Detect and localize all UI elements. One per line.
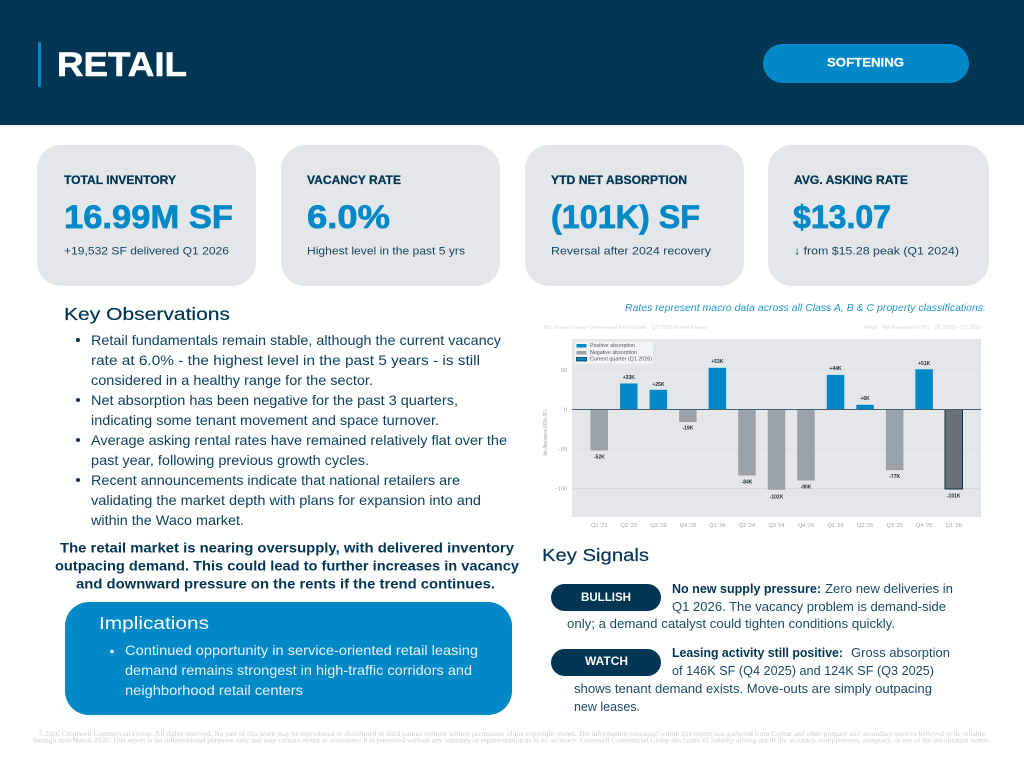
footer disclaimer: through mid-March 2026. This report is for informational purposes only and may contain errors or omissions; it is presented without any warranty or representation as to its accuracy. Cromwell Commercial Group disclaims all liability arising out of the accuracy, completeness, adequacy, or use of the information herein. [33, 736, 991, 744]
KPI card: YTD net absorption [525, 145, 744, 286]
signal: watch: new leases. [574, 700, 640, 714]
bold takeaway: and downward pressure on the rents if the trend continues. [76, 576, 495, 592]
KPI card: YTD net absorption: Reversal after 2024 recovery [551, 246, 712, 258]
key observations bullet list: considered in a healthy range for the sector. [91, 372, 373, 388]
KPI card: vacancy rate: 6.0% [307, 199, 390, 235]
key observations bullet list: Net absorption has been negative for the past 3 quarters, [91, 392, 458, 408]
KPI card: average asking rate: ↓ from $15.28 peak (Q1 2024) [794, 246, 959, 258]
x axis labels: Q1 '24 [709, 523, 726, 529]
x axis labels: Q1 '26 [946, 523, 962, 529]
KPI card: total inventory: 16.99M SF [64, 199, 233, 235]
KPI card: vacancy rate [281, 145, 500, 286]
bar value labels: +51K [918, 361, 931, 367]
footer disclaimer: ©2026 Cromwell Commercial Group. All rights reserved. No part of this work may be reproduced or distributed to third parties without written permission of the copyright owner. The information contained within this report was gathered from CoStar and other primary and secondary sources believed to be reliable [39, 730, 985, 738]
bold takeaway [55, 540, 520, 592]
KPI card: YTD net absorption: (101K) SF [551, 199, 700, 235]
x axis labels: Q3 '23 [650, 523, 667, 529]
bar value labels: -84K [742, 480, 753, 486]
bar chart: net absorption: 0 [564, 408, 567, 414]
signal: bullish: Q1 2026. The vacancy problem is demand-side [672, 600, 946, 614]
header band [0, 0, 1024, 125]
key observations bullet list: Average asking rental rates have remained relatively flat over the [91, 432, 507, 448]
KPI card: average asking rate [768, 145, 989, 286]
panel: implications [65, 602, 512, 715]
bar value labels: -52K [594, 454, 605, 460]
bar value labels: -77K [889, 474, 901, 480]
signal: bullish: only; a demand catalyst could tighten conditions quickly. [567, 617, 895, 631]
KPI card: average asking rate: AVG. ASKING RATE [794, 173, 908, 187]
bars [572, 368, 981, 490]
signal: watch: Gross absorption [851, 646, 950, 660]
key observations bullet list: past year, following previous growth cycles. [91, 452, 369, 468]
x axis labels: Q2 '25 [857, 523, 873, 529]
key signals heading: Key Signals [542, 545, 649, 565]
status pill [763, 44, 969, 83]
signal: watch: shows tenant demand exists. Move-outs are simply outpacing [574, 682, 932, 696]
panel: implications: neighborhood retail centers [125, 682, 303, 698]
KPI card: total inventory [37, 145, 256, 286]
panel: implications: Implications [99, 613, 209, 633]
bar value labels: -101K [947, 494, 961, 500]
key observations bullet list: within the Waco market. [90, 512, 244, 528]
chart note: Rates represent macro data across all Class A, B & C property classifications. [625, 302, 986, 314]
x axis labels: Q2 '23 [621, 523, 637, 529]
key observations bullet list: validating the market depth with plans for expansion into and [91, 492, 481, 508]
bar value labels: -19K [682, 426, 694, 432]
legend: Current quarter (Q1 2026) [590, 357, 652, 363]
bar value labels: +33K [623, 375, 635, 381]
key observations bullet list: rate at 6.0% - the highest level in the past 5 years - is still [91, 352, 480, 368]
key observations bullet list: Recent announcements indicate that national retailers are [91, 472, 460, 488]
bar chart: net absorption: Retail · Net Absorption (SF) · Q1 2023 – Q1 2026 [864, 325, 981, 331]
signal: watch: WATCH [585, 656, 628, 668]
title: RETAIL [57, 46, 187, 84]
KPI card: average asking rate: $13.07 [793, 199, 891, 235]
bar value labels: +6K [860, 396, 870, 402]
x axis labels [591, 523, 962, 529]
signal: bullish: BULLISH [581, 592, 631, 604]
footer disclaimer [33, 730, 991, 744]
legend [575, 342, 653, 364]
bar chart: net absorption: 50 [561, 368, 567, 374]
key observations heading: Key Observations [64, 304, 230, 324]
bold takeaway: outpacing demand. This could lead to further increases in vacancy [55, 558, 520, 574]
bar value labels: -102K [770, 494, 784, 500]
bold takeaway: The retail market is nearing oversupply, with delivered inventory [60, 540, 515, 556]
key observations bullet list [76, 332, 507, 528]
panel: implications: Continued opportunity in service-oriented retail leasing [125, 642, 478, 658]
status pill: SOFTENING [827, 58, 904, 70]
bar chart: net absorption: McLennan County Commercial Real Estate · Q1 2026 Market Report [544, 325, 708, 331]
key observations bullet list: indicating some tenant movement and space turnover. [91, 412, 439, 428]
x axis labels: Q4 '24 [798, 523, 814, 529]
x axis labels: Q3 '24 [768, 523, 785, 529]
KPI card: total inventory: TOTAL INVENTORY [64, 173, 176, 187]
bar chart: net absorption [543, 325, 981, 529]
panel: implications: demand remains strongest in high-traffic corridors and [125, 662, 472, 678]
x axis labels: Q4 '23 [680, 523, 696, 529]
x axis labels: Q4 '25 [916, 523, 932, 529]
bar chart: net absorption: −100 [554, 486, 567, 492]
legend: Negative absorption [590, 350, 637, 356]
signal: watch: of 146K SF (Q4 2025) and 124K SF (Q3 2025) [672, 664, 934, 678]
signal: bullish [551, 582, 953, 631]
x axis labels: Q2 '24 [739, 523, 755, 529]
bar value labels [594, 359, 961, 500]
bar value labels: +25K [652, 382, 665, 388]
signal: watch [551, 646, 950, 714]
x axis labels: Q1 '23 [591, 523, 607, 529]
KPI card: vacancy rate: Highest level in the past 5 yrs [307, 246, 466, 258]
legend: Positive absorption [590, 343, 635, 349]
bar chart: net absorption: Net Absorption (000s SF) [543, 410, 549, 456]
x axis labels: Q3 '25 [887, 523, 903, 529]
KPI card: total inventory: +19,532 SF delivered Q1 2026 [64, 246, 229, 258]
bar chart: net absorption: −50 [558, 447, 567, 453]
signal: watch: Leasing activity still positive: [672, 646, 843, 660]
KPI card: YTD net absorption: YTD NET ABSORPTION [551, 173, 687, 187]
x axis labels: Q1 '25 [827, 523, 844, 529]
signal: bullish: No new supply pressure: [672, 582, 821, 596]
key observations bullet list: Retail fundamentals remain stable, although the current vacancy [91, 332, 501, 348]
signal: bullish: Zero new deliveries in [825, 582, 953, 596]
bar value labels: +53K [711, 359, 724, 365]
KPI card: vacancy rate: VACANCY RATE [307, 173, 401, 187]
bar value labels: +44K [830, 366, 842, 372]
bar value labels: -90K [801, 484, 812, 490]
